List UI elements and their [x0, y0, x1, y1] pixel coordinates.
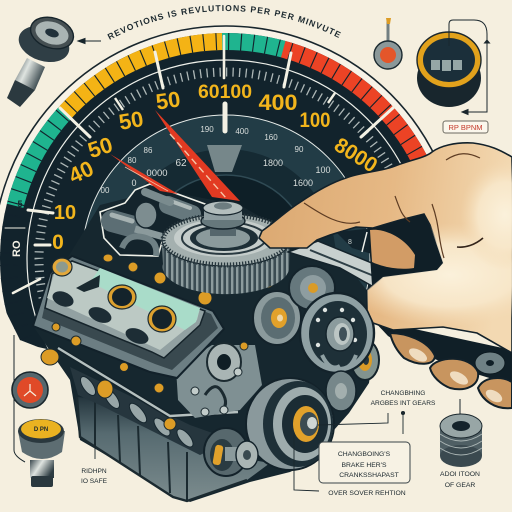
disc behind fingers	[475, 352, 505, 374]
label: rpm is safe: RIDHPN	[81, 468, 107, 475]
label: RP BPNM: RP BPNM	[448, 123, 483, 132]
white scale numbers: 80	[128, 156, 137, 165]
yellow scale numbers: 50	[85, 132, 116, 163]
crank pulley	[246, 378, 334, 470]
white scale numbers: 171	[83, 233, 97, 242]
side linkage block	[176, 345, 262, 418]
dark shadow under hand	[368, 212, 448, 285]
label: rpm is safe	[81, 443, 108, 485]
arrow to bolt	[78, 38, 101, 44]
band labels: 5	[17, 199, 23, 209]
red needles	[110, 110, 240, 201]
white scale numbers: 62	[175, 158, 187, 169]
label: changing gears	[371, 390, 436, 407]
icon: gear washer stack	[440, 399, 482, 467]
lower left small pulley	[204, 428, 258, 476]
nail 1	[407, 346, 429, 364]
label: addition of gear: ADOI ITOON	[440, 471, 480, 478]
arrow on cover	[76, 275, 100, 292]
icon: small probe	[374, 18, 402, 69]
white scale numbers: 100	[315, 165, 331, 175]
yellow scale numbers: 50	[154, 86, 182, 115]
callout box: crankshaft: BRAKE HER'S	[341, 462, 387, 469]
index finger	[370, 230, 415, 269]
yellow scale numbers: 400	[258, 90, 298, 115]
label: changing gears: ARGBES INT GEARS	[371, 400, 436, 407]
palm	[259, 143, 512, 353]
inner scale	[84, 114, 370, 290]
callout leader lines	[294, 411, 405, 491]
cover ports	[52, 258, 72, 276]
finger 2	[430, 359, 478, 389]
white scale numbers: 1600	[293, 178, 313, 188]
connector line	[449, 20, 490, 114]
wrench handle	[288, 241, 384, 286]
title along arc: REVOTIONS IS REVLUTIONS PER PER MINVUTE	[107, 5, 341, 40]
white scale numbers: 190	[200, 125, 214, 134]
colour band	[0, 33, 426, 346]
valve cover	[42, 258, 218, 370]
hand	[259, 143, 512, 408]
timing gears	[253, 266, 379, 411]
camshaft pipes	[100, 184, 208, 256]
outer white arc and ticks	[26, 59, 401, 349]
label: changing gears: CHANGBHING	[381, 390, 425, 397]
icon: yellow cap bolt	[18, 419, 65, 487]
yellow scale numbers: 40	[65, 156, 97, 189]
dial fragment under thumb: 8	[348, 239, 352, 246]
white scale numbers: 0000	[146, 168, 168, 179]
RO label: RO	[11, 240, 23, 257]
lower left connector line	[14, 335, 25, 462]
white scale numbers	[100, 126, 330, 193]
lower block scallops	[70, 367, 232, 455]
white scale numbers: 86	[144, 146, 153, 155]
finger 1	[390, 333, 435, 364]
engine	[33, 184, 379, 502]
palm highlight	[367, 162, 512, 320]
label: rpm is safe: IO SAFE	[81, 478, 108, 485]
orange bolts	[41, 254, 274, 430]
yellow scale numbers: 10	[54, 202, 76, 224]
tachometer dial	[0, 25, 433, 349]
hub	[196, 201, 250, 248]
yellow scale numbers: 8000	[330, 133, 381, 177]
top gear	[162, 214, 290, 294]
white scale numbers: 160	[264, 133, 278, 142]
dial fragment under thumb	[336, 228, 375, 254]
white scale numbers: 90	[295, 145, 304, 154]
nail 3	[484, 387, 504, 405]
engine body mass	[33, 190, 374, 502]
white scale numbers: 400	[235, 127, 249, 136]
yellow scale numbers: 60100	[198, 82, 252, 103]
nail 2	[448, 369, 470, 387]
yellow scale numbers: 100	[300, 109, 330, 132]
centre grid trapezoid	[207, 145, 242, 172]
white scale numbers: 0	[131, 178, 137, 188]
oil pan	[77, 397, 270, 501]
flange rail	[58, 348, 238, 416]
dial face	[0, 33, 426, 349]
yellow scale numbers	[52, 82, 381, 254]
callout box: crankshaft: CRANKSSHAPAST	[339, 472, 399, 479]
yellow scale numbers: 50	[117, 106, 145, 135]
label: addition of gear	[440, 471, 480, 489]
valve cover gasket	[33, 256, 224, 378]
icon: dial puck	[417, 32, 481, 107]
label: over sover: OVER SOVER REHTION	[328, 490, 406, 497]
major needles	[5, 36, 394, 293]
icon: yellow cap bolt: D PN	[34, 427, 48, 433]
callout box: crankshaft: CHANGBOING'S	[338, 451, 391, 458]
crease lines	[304, 154, 483, 258]
icon: bolt top left	[7, 12, 78, 107]
callout box: crankshaft	[319, 442, 410, 483]
finger 3	[478, 378, 512, 408]
icon: red gauge circle	[12, 372, 48, 408]
yellow scale numbers: 0	[52, 231, 64, 254]
label: addition of gear: OF GEAR	[445, 482, 475, 489]
white scale numbers: 1800	[263, 158, 283, 168]
label: RP BPNM	[443, 121, 488, 133]
white scale numbers: 00	[101, 186, 110, 195]
